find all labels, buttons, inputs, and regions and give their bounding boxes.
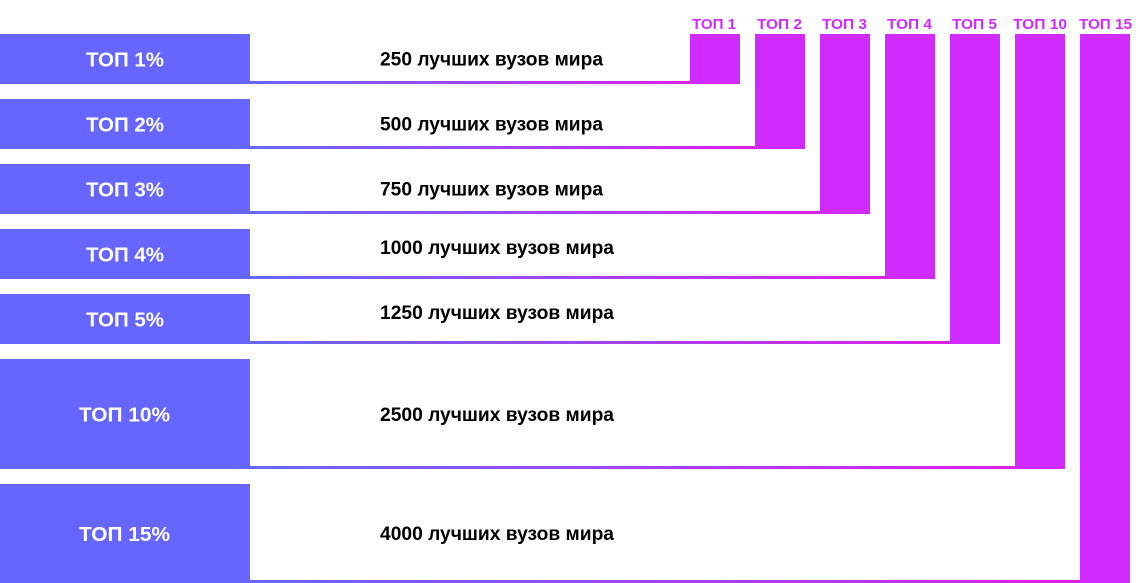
row: ТОП 10: ТОП 10% bbox=[79, 404, 170, 426]
row: ТОП 3 bbox=[0, 17, 870, 214]
row: ТОП 2: 500 лучших вузов мира bbox=[380, 114, 603, 136]
row: ТОП 2 bbox=[0, 17, 805, 149]
row: ТОП 1 bbox=[0, 17, 740, 84]
row: ТОП 1: 250 лучших вузов мира bbox=[380, 50, 603, 70]
row: ТОП 4: 1000 лучших вузов мира bbox=[380, 238, 614, 259]
row: ТОП 15: 4000 лучших вузов мира bbox=[380, 524, 614, 545]
row: ТОП 2: ТОП 2 bbox=[757, 17, 802, 33]
row: ТОП 4: ТОП 4% bbox=[86, 244, 164, 266]
row: ТОП 1: ТОП 1 bbox=[692, 17, 736, 33]
row: ТОП 1: ТОП 1% bbox=[86, 50, 164, 72]
row: ТОП 10: 2500 лучших вузов мира bbox=[380, 405, 614, 426]
row: ТОП 3: 750 лучших вузов мира bbox=[380, 180, 603, 200]
row: ТОП 5: ТОП 5 bbox=[952, 17, 997, 33]
row: ТОП 3: ТОП 3 bbox=[822, 17, 867, 33]
row: ТОП 10 bbox=[0, 17, 1067, 469]
row: ТОП 15: ТОП 15% bbox=[79, 524, 170, 546]
row: ТОП 5: 1250 лучших вузов мира bbox=[380, 303, 614, 324]
row: ТОП 2: ТОП 2% bbox=[86, 114, 164, 136]
row: ТОП 4: ТОП 4 bbox=[887, 17, 932, 33]
row: ТОП 5 bbox=[0, 17, 1000, 344]
row: ТОП 10: ТОП 10 bbox=[1013, 17, 1067, 33]
row: ТОП 15: ТОП 15 bbox=[1079, 17, 1132, 33]
row: ТОП 5: ТОП 5% bbox=[86, 310, 164, 332]
row: ТОП 3: ТОП 3% bbox=[86, 180, 164, 202]
row: ТОП 4 bbox=[0, 17, 935, 279]
